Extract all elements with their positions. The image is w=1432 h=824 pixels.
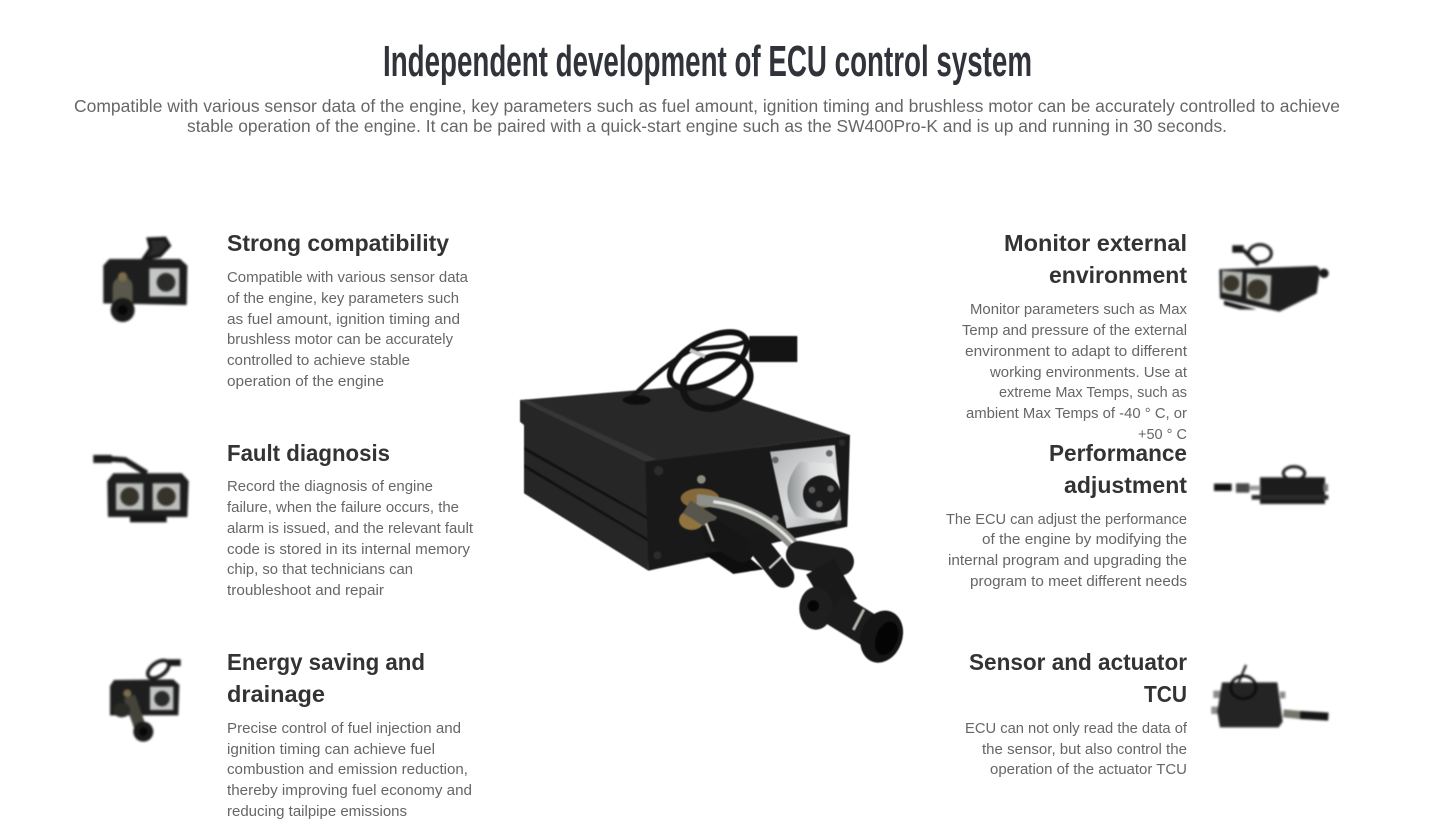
description: thereby improving fuel economy and [227,783,472,799]
description: Precise control of fuel injection and [227,721,461,737]
description: extreme Max Temps, such as [999,385,1187,401]
description [227,479,473,599]
cable loop and plug [623,321,797,418]
box top face [520,385,850,462]
description: code is stored in its internal memory [227,542,471,558]
panel: energy saving and drainage [110,649,472,820]
description: of the engine, key parameters such [227,291,459,307]
description: Monitor parameters such as Max [970,302,1188,318]
description: controlled to achieve stable [227,353,410,369]
description: ignition timing can achieve fuel [227,742,435,758]
brass fitting and clear tube [679,475,795,547]
heading: drainage [227,681,325,707]
description [965,721,1188,778]
description: Record the diagnosis of engine [227,479,433,495]
heading [1004,230,1187,288]
heading: adjustment [1064,472,1187,498]
icon: ECU front view with hoses [110,657,181,742]
description: the sensor, but also control the [982,742,1187,758]
description: ambient Max Temps of -40 ° C, or [966,406,1187,422]
heading: Fault diagnosis [227,440,390,466]
title: Independent development of ECU control system [383,37,1032,86]
description: of the engine by modifying the [982,532,1187,548]
corner screws [653,439,845,559]
panel: performance adjustment [946,440,1328,590]
description: operation of the engine [227,374,384,390]
pneumatic fittings [703,523,910,669]
intro text: Compatible with various sensor data of the engine, key parameters such as fuel amount, ignition timing and brushless motor can be accurately controlled to achieve [74,96,1340,116]
description: environment to adapt to different [965,344,1187,360]
heading: Energy saving and [227,649,425,675]
heading [969,649,1187,707]
aviation connector [770,445,842,528]
heading: environment [1049,262,1187,288]
description: ECU can not only read the data of [965,721,1188,737]
description: Temp and pressure of the external [962,323,1187,339]
intro text: stable operation of the engine. It can be paired with a quick-start engine such as the SW400Pro-K and is up and running in 30 seconds. [187,116,1227,136]
description [227,270,469,390]
description: reducing tailpipe emissions [227,804,407,820]
description [962,302,1188,443]
intro text [74,96,1340,136]
description: failure, when the failure occurs, the [227,500,459,516]
icon: ECU with two connectors [93,455,189,522]
box left side [520,400,648,571]
description: Compatible with various sensor data [227,270,469,286]
description: working environments. Use at [989,365,1187,381]
heading [1049,440,1187,498]
description: internal program and upgrading the [948,553,1187,569]
description: +50 ° C [1138,427,1187,443]
icon: ECU top view [1211,665,1328,727]
heading: Sensor and actuator [969,649,1187,675]
description: combustion and emission reduction, [227,762,468,778]
panel: sensor and actuator TCU [965,649,1328,778]
heading: Monitor external [1004,230,1187,256]
icon: ECU angled with two connectors [1219,245,1329,312]
icon: ECU with fitting [103,238,187,322]
box front face [645,435,850,571]
central ECU product image [520,321,910,669]
panel: strong compatibility [103,230,469,390]
description: alarm is issued, and the relevant fault [227,521,473,537]
panel: fault diagnosis [93,440,473,599]
panel: monitor external environment [962,230,1329,443]
description: as fuel amount, ignition timing and [227,312,460,328]
description [227,721,472,820]
heading: Performance [1049,440,1187,466]
description: The ECU can adjust the performance [946,512,1187,528]
heading: TCU [1144,681,1187,707]
heading [227,649,425,707]
description: operation of the actuator TCU [990,762,1187,778]
icon: ECU side view with hose [1214,467,1328,504]
description: troubleshoot and repair [227,583,384,599]
description [946,512,1187,590]
heading: Strong compatibility [227,230,449,256]
description: brushless motor can be accurately [227,332,454,348]
description: program to meet different needs [970,574,1187,590]
description: chip, so that technicians can [227,562,413,578]
